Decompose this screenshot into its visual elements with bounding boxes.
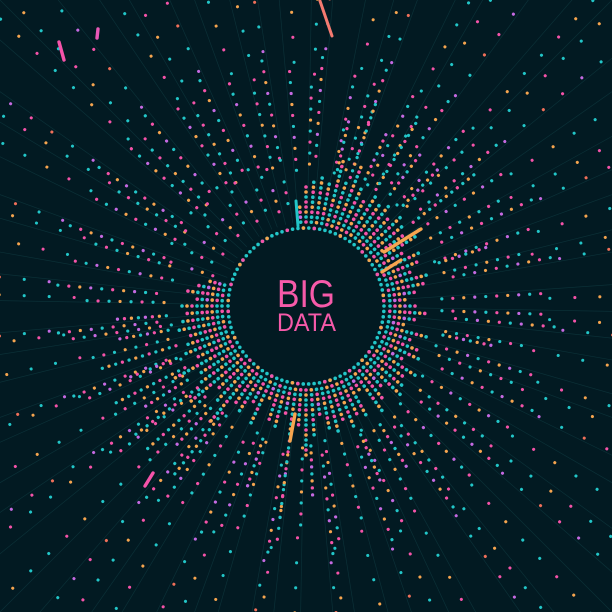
streak: top centre (320, 1, 332, 36)
dotted ring around the centre (228, 228, 384, 384)
streak: top left pink (59, 42, 64, 60)
title line: DATA: DATA (277, 309, 336, 337)
title: BIG DATA (277, 273, 336, 337)
streak: top left short (97, 29, 98, 38)
mid-range denser spokes (100, 103, 492, 519)
streak: upper right orange (384, 229, 421, 252)
highlight streaks (59, 1, 421, 486)
streak: bottom (290, 414, 295, 441)
streak: above ring (296, 201, 298, 226)
streak: lower left pink (145, 473, 153, 486)
streak: right orange (382, 260, 401, 272)
dense inner dotted spokes (163, 158, 427, 456)
title line: BIG: BIG (277, 273, 335, 316)
